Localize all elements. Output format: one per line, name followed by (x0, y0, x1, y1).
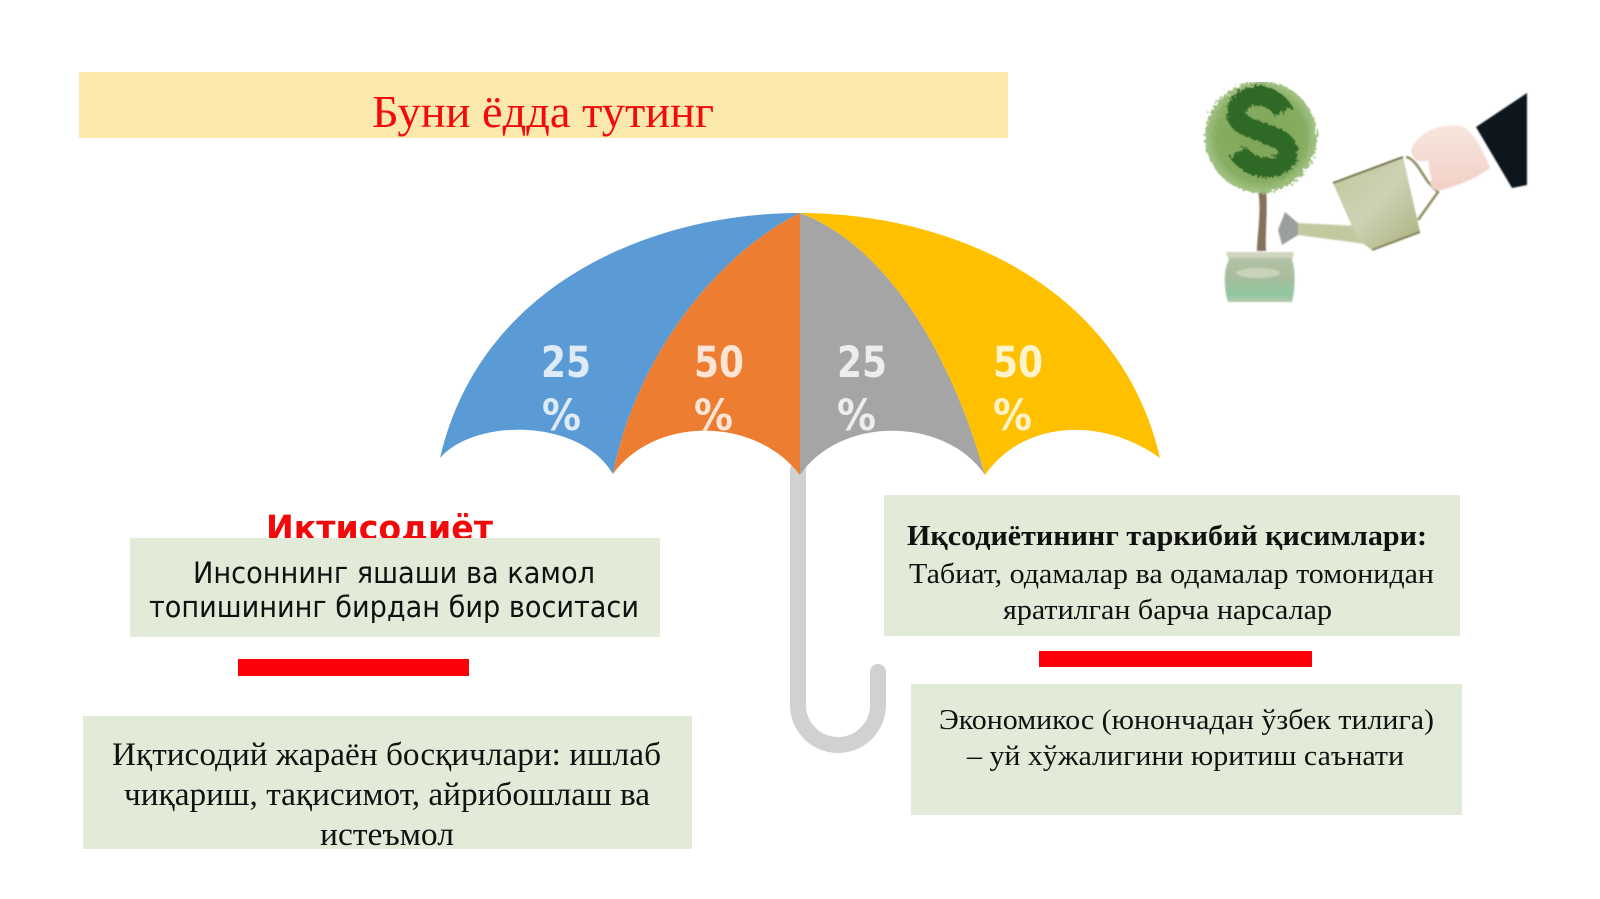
heading: Иктисодиёт: Иктисодиёт (266, 509, 494, 549)
red divider right (1039, 651, 1312, 667)
components text (907, 520, 1434, 626)
panel: etymology (911, 684, 1462, 815)
label: 50% yellow: 50 (993, 338, 1043, 388)
icon: ceramic pot (1225, 252, 1295, 302)
components text: Иқсодиётининг таркибий қисимлари: (907, 520, 1427, 552)
etymology text: Экономикос (юнончадан ўзбек тилига) (939, 704, 1434, 736)
stages text: Иқтисодий жараён босқичлари: ишлаб (112, 737, 661, 773)
label: 50% orange: % (694, 391, 733, 441)
stages text: истеъмол (320, 817, 454, 853)
stages text: чиқариш, тақисимот, айрибошлаш ва (124, 777, 650, 813)
label: 25% blue: 25 (541, 338, 591, 388)
label: 25% gray (837, 338, 887, 441)
etymology text (939, 704, 1434, 772)
canopy segment: blue (440, 213, 800, 474)
canopy segment: orange (613, 213, 800, 475)
definition text: топишининг бирдан бир воситаси (149, 590, 639, 624)
label: 25% blue: % (542, 391, 581, 441)
components text: яратилган барча нарсалар (1003, 594, 1332, 626)
label: 25% gray: 25 (837, 338, 887, 388)
definition text (149, 556, 639, 624)
stages text (112, 737, 661, 853)
etymology text: – уй хўжалигини юритиш саънати (966, 740, 1404, 772)
panel: definition (130, 538, 660, 637)
canopy segment: gray (800, 213, 985, 475)
icon: watering can (1278, 157, 1438, 250)
title banner (79, 72, 1008, 138)
icon: topiary money tree (1205, 81, 1317, 302)
label: 50% orange (694, 338, 744, 441)
illustration: money tree watered from a can (1205, 81, 1527, 302)
icon: hand in suit sleeve (1411, 93, 1527, 190)
panel: components of the economy (884, 495, 1460, 636)
label: 25% gray: % (837, 391, 876, 441)
components text: Табиат, одамалар ва одамалар томонидан (909, 558, 1434, 590)
definition text: Инсоннинг яшаши ва камол (193, 556, 595, 590)
label: 50% orange: 50 (694, 338, 744, 388)
label: 50% yellow (993, 338, 1043, 441)
panel: economic process stages (83, 716, 692, 853)
canopy segment: yellow (800, 213, 1160, 475)
umbrella chart (440, 213, 1160, 745)
red divider left (238, 659, 469, 676)
umbrella handle (798, 470, 878, 745)
label: 50% yellow: % (993, 391, 1032, 441)
label: 25% blue (541, 338, 591, 441)
title text: Буни ёдда тутинг (372, 87, 714, 137)
